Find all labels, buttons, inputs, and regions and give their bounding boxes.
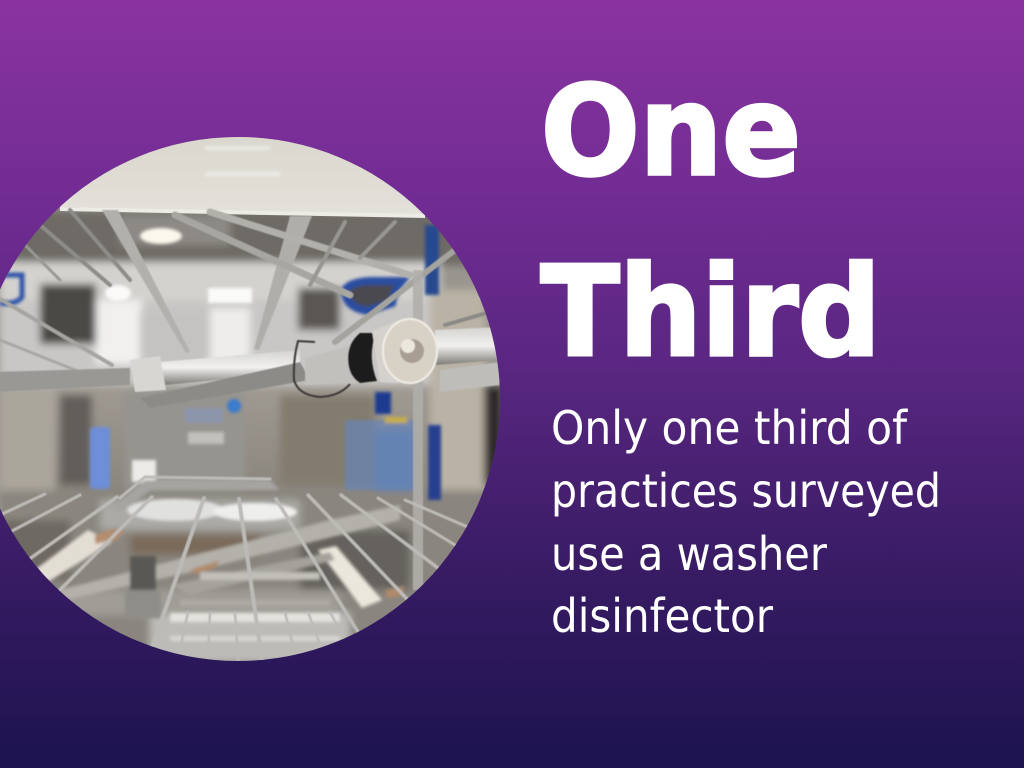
title line: Third: Third bbox=[541, 241, 881, 385]
rack clip and end cap bbox=[294, 318, 438, 397]
specular highlights on ceiling bbox=[205, 146, 280, 176]
body line 3: use a washer bbox=[551, 527, 827, 581]
upper rack rods bbox=[0, 210, 490, 370]
title line: One: One bbox=[541, 60, 801, 204]
circular photo: washer disinfector interior bbox=[0, 130, 530, 670]
body line 1: Only one third of bbox=[551, 401, 909, 455]
vertical rack post bbox=[413, 270, 423, 590]
lower wire shelf rods bbox=[0, 477, 470, 660]
photo details: blurred mid-ground shapes bbox=[0, 225, 441, 641]
horizontal rack tubes bbox=[0, 327, 500, 408]
photo background: blurred chamber bbox=[0, 130, 530, 670]
body text bbox=[551, 401, 941, 643]
title: One Third bbox=[541, 60, 881, 385]
body line 2: practices surveyed bbox=[551, 464, 941, 518]
ceiling edge bbox=[60, 207, 425, 218]
ceiling panel bbox=[60, 137, 426, 216]
body line 4: disinfector bbox=[551, 589, 773, 643]
